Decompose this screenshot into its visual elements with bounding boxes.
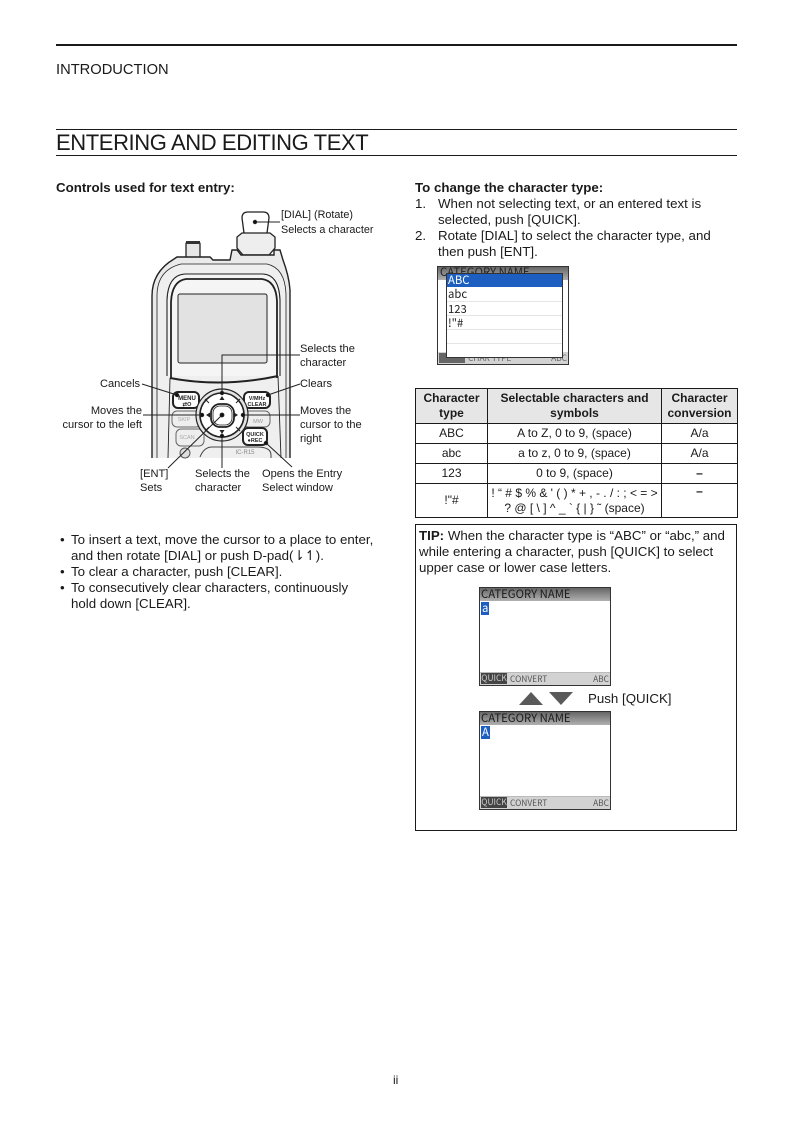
character table: 0 to 9, (space): [536, 466, 613, 480]
dial knob: [242, 212, 269, 233]
keypad buttons: ●REC: [248, 438, 262, 444]
page title: ENTERING AND EDITING TEXT: [56, 130, 368, 155]
label: moves left: [62, 405, 142, 431]
steps: selected, push [QUICK].: [438, 212, 581, 227]
character table: –: [696, 466, 703, 480]
heading rule bottom: [56, 155, 737, 156]
label: moves left: cursor to the left: [62, 419, 142, 431]
label: moves right: right: [300, 433, 322, 445]
arrows: toggle: [519, 692, 573, 705]
steps: 2.: [415, 228, 426, 243]
label: ent: Sets: [140, 482, 162, 494]
screen: lower case: ABC: [593, 673, 609, 685]
character table: 123: [441, 466, 462, 480]
label: selects down: [195, 468, 250, 494]
screen: upper case: CONVERT: [510, 797, 547, 809]
character table: ? @ [ \ ] ^ _ ` { | } ˜ (space): [504, 500, 645, 514]
keypad buttons: SCAN: [179, 435, 195, 441]
label: dial: [281, 209, 374, 236]
tip text: TIP: When the character type is “ABC” or “abc,” and: [419, 528, 725, 543]
label: selects up: character: [300, 357, 346, 369]
bullet list: [60, 532, 373, 611]
keypad buttons: CLEAR: [248, 402, 266, 408]
screen: lower case: a: [482, 600, 488, 616]
character table: conversion: [667, 406, 732, 420]
screen: type menu: 123: [448, 301, 467, 317]
top rule: [56, 44, 737, 46]
character table: A/a: [690, 446, 708, 460]
screen: upper case: CATEGORY NAME: [481, 710, 571, 726]
label: push quick: Push [QUICK]: [588, 691, 672, 706]
change type heading: To change the character type:: [415, 180, 603, 195]
callout lines: [142, 220, 300, 468]
screen: lower case: CATEGORY NAME: [481, 586, 571, 602]
label: selects up: [300, 343, 355, 369]
keypad buttons: V/MHz: [249, 396, 266, 402]
keypad buttons: MW: [253, 419, 264, 425]
screen: type menu: ABC: [551, 352, 567, 364]
character table: Character: [671, 391, 728, 405]
label: moves right: Moves the: [300, 405, 351, 417]
bullet list: To insert a text, move the cursor to a place to enter,: [71, 532, 373, 547]
d-pad: [196, 389, 248, 441]
character table: a to z, 0 to 9, (space): [518, 446, 631, 460]
screen: upper case: ABC: [593, 797, 609, 809]
radio body: [152, 212, 290, 458]
label: quick: Opens the Entry: [262, 468, 342, 480]
character table: abc: [442, 446, 461, 460]
tip text: [419, 528, 725, 575]
screen: type menu: [437, 266, 569, 365]
label: clears: Clears: [300, 378, 332, 390]
steps: Rotate [DIAL] to select the character type, and: [438, 228, 711, 243]
screen: lower case: QUICK: [481, 672, 507, 684]
keypad buttons: QUICK: [246, 432, 264, 438]
screen: [178, 294, 267, 363]
bullet list: •: [60, 580, 65, 595]
character table: Character: [423, 391, 480, 405]
label: quick: [262, 468, 342, 494]
character table: –: [696, 484, 703, 498]
label: cancels: Cancels: [100, 378, 140, 390]
character table: [415, 388, 738, 518]
label: dial: [DIAL] (Rotate): [281, 209, 353, 221]
steps: [415, 196, 711, 259]
label: moves right: [300, 405, 362, 445]
character table: A to Z, 0 to 9, (space): [517, 426, 632, 440]
character table: ! “ # $ % & ' ( ) * + , - . / : ; < = >: [491, 486, 658, 500]
keypad buttons: [172, 392, 271, 458]
tip box: [415, 524, 737, 831]
page number: ii: [393, 1073, 398, 1087]
label: ent: [ENT]: [140, 468, 168, 480]
character table: Selectable characters and: [500, 391, 649, 405]
bullet list: •: [60, 564, 65, 579]
screen: type menu: abc: [448, 286, 467, 302]
screen: type menu: !"#: [448, 315, 463, 331]
bullet list: and then rotate [DIAL] or push D-pad(⇂↿).: [71, 548, 324, 563]
label: quick: Select window: [262, 482, 333, 494]
bullet list: To consecutively clear characters, continuously: [71, 580, 348, 595]
screen: type menu: ABC: [448, 272, 470, 288]
bullet list: •: [60, 532, 65, 547]
steps: When not selecting text, or an entered text is: [438, 196, 701, 211]
screen: upper case: QUICK: [481, 796, 507, 808]
bullet list: hold down [CLEAR].: [71, 596, 191, 611]
diagram: radio with callouts: [142, 211, 300, 468]
character table: ABC: [439, 426, 464, 440]
screen: upper case: [479, 711, 611, 810]
character table: !"#: [444, 493, 459, 507]
label: moves left: Moves the: [91, 405, 142, 417]
keypad buttons: SKIP: [178, 417, 191, 423]
character table: A/a: [690, 426, 708, 440]
screen: type menu: CHAR TYPE: [468, 352, 511, 364]
keypad buttons: ⇄O: [183, 400, 192, 408]
antenna stub: [186, 242, 200, 257]
label: selects down: character: [195, 482, 241, 494]
character table: symbols: [550, 406, 599, 420]
screen: upper case: A: [482, 724, 489, 740]
tip text: while entering a character, push [QUICK] to select: [419, 544, 713, 559]
keypad buttons: MENU: [178, 396, 196, 402]
steps: 1.: [415, 196, 426, 211]
screen: lower case: [479, 587, 611, 686]
bullet list: To clear a character, push [CLEAR].: [71, 564, 282, 579]
keypad buttons: IC-R15: [235, 450, 255, 456]
label: selects up: Selects the: [300, 343, 355, 355]
controls heading: Controls used for text entry:: [56, 180, 235, 195]
tip text: upper case or lower case letters.: [419, 560, 611, 575]
character table: type: [439, 406, 464, 420]
label: selects down: Selects the: [195, 468, 250, 480]
steps: then push [ENT].: [438, 244, 538, 259]
label: dial: Selects a character: [281, 224, 373, 236]
screen: lower case: CONVERT: [510, 673, 547, 685]
label: moves right: cursor to the: [300, 419, 362, 431]
label: ent: [140, 468, 168, 494]
section label: INTRODUCTION: [56, 62, 169, 78]
heading rule top: [56, 129, 737, 130]
